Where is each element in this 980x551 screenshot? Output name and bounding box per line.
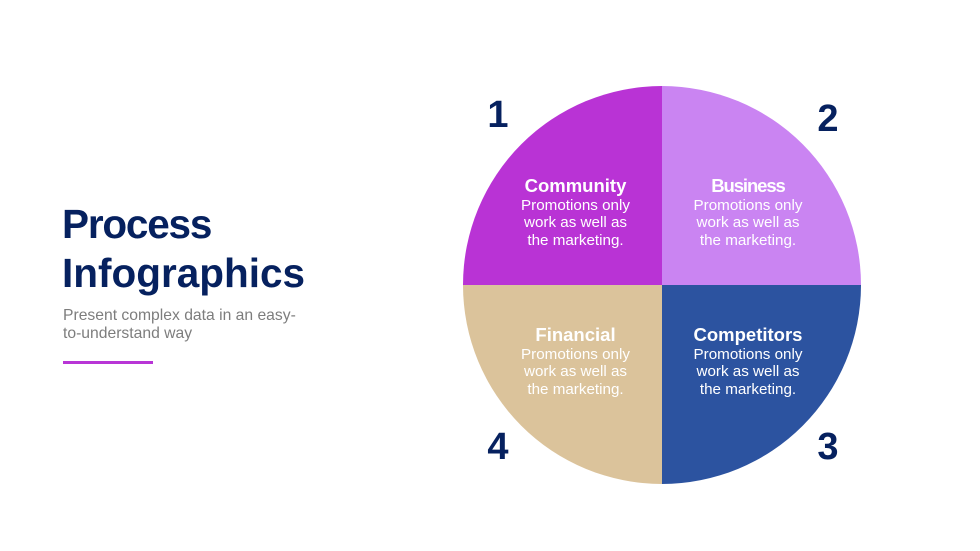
segment text: business: Promotions only — [694, 196, 802, 214]
segment text: business: the marketing. — [700, 232, 796, 248]
segment text: community — [521, 175, 630, 248]
number 4: 4 — [487, 426, 509, 468]
segment text: competitors: Promotions only — [694, 346, 802, 362]
subtitle: Present complex data in an easy- — [63, 307, 296, 324]
title: Process — [62, 200, 211, 246]
segment text: competitors: Competitors — [694, 324, 802, 345]
segment text: competitors — [694, 324, 802, 398]
title: Infographics — [62, 250, 305, 296]
pie chart — [463, 86, 861, 484]
segment text: financial: the marketing. — [527, 380, 624, 398]
segment text: community: work as well as — [524, 214, 627, 231]
segment text: community: the marketing. — [527, 232, 624, 248]
subtitle — [63, 307, 296, 342]
segment text: business — [694, 175, 802, 248]
segment text: business: Business — [711, 175, 785, 196]
segment text: community: Community — [525, 175, 626, 196]
segment text: financial: Promotions only — [521, 346, 630, 362]
title — [62, 200, 305, 296]
number 2: 2 — [817, 98, 839, 140]
subtitle: to-understand way — [63, 324, 192, 342]
segment text: financial — [521, 324, 630, 398]
segment text: financial: Financial — [535, 324, 616, 345]
segment text: financial: work as well as — [524, 363, 627, 380]
number 1: 1 — [487, 94, 509, 136]
segment text: business: work as well as — [697, 214, 799, 231]
segment text: community: Promotions only — [521, 196, 630, 214]
segment text: competitors: the marketing. — [700, 380, 796, 398]
number 3: 3 — [817, 426, 839, 468]
segment text: competitors: work as well as — [697, 363, 799, 380]
accent underline — [63, 361, 153, 364]
